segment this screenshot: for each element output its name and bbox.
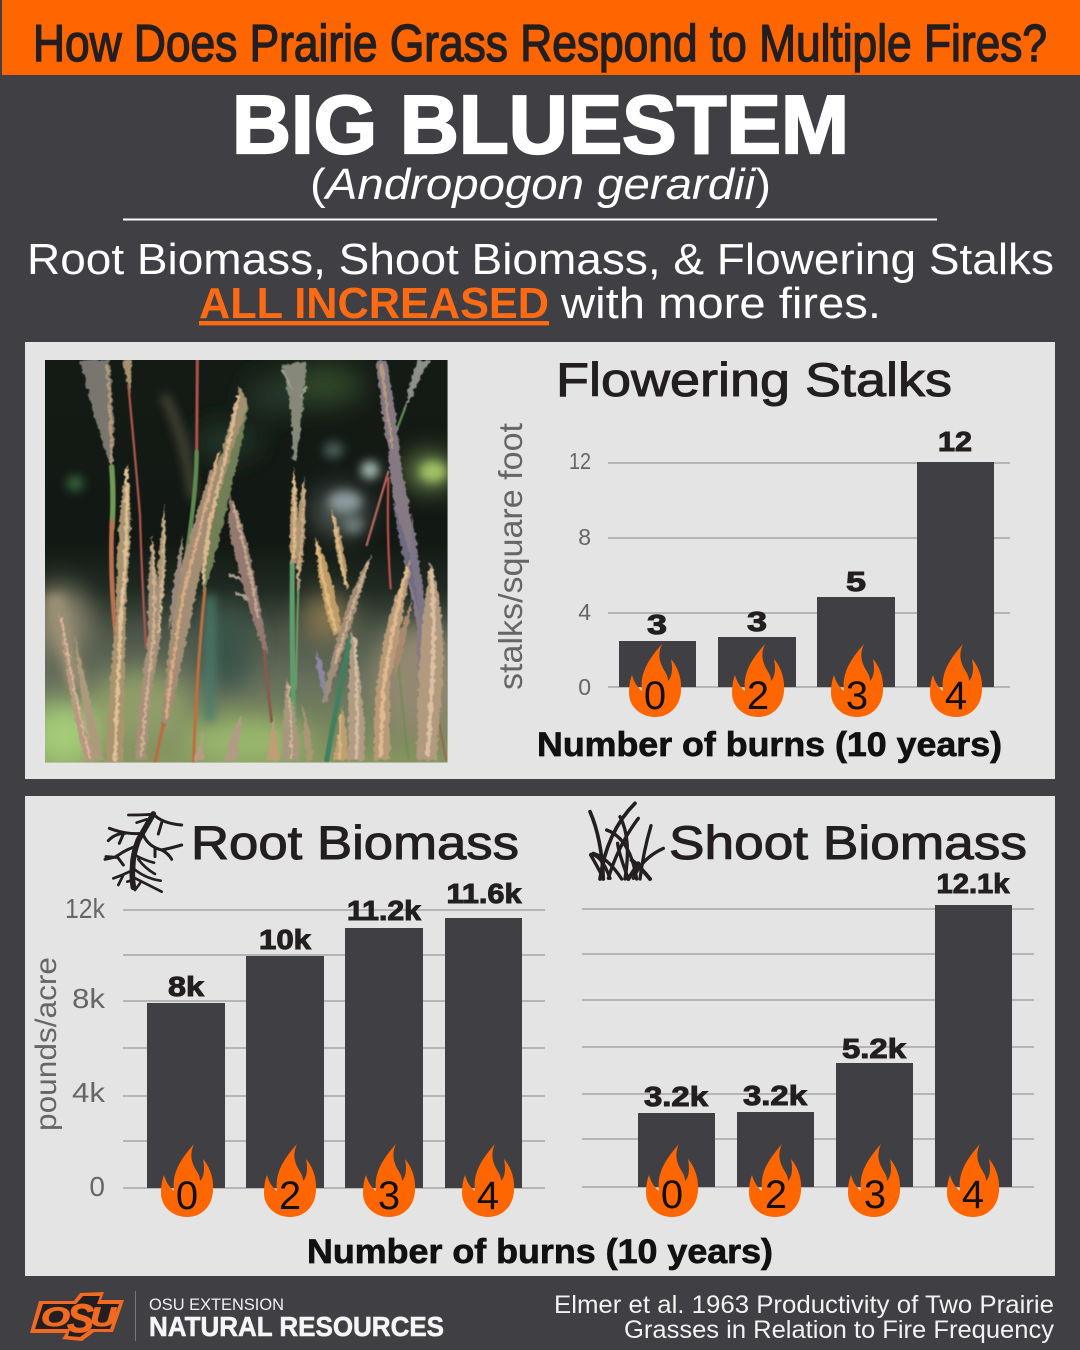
y axis label: pounds per acre: pounds/acre: [30, 957, 63, 1131]
logo: OSU: [30, 1292, 124, 1341]
bar chart: root biomass: 3: [378, 1174, 400, 1218]
heading: root biomass: Root Biomass: [191, 816, 519, 869]
panel: root and shoot biomass: [25, 796, 1055, 1276]
x axis label: number of burns: Number of burns (10 years): [307, 1233, 773, 1271]
bar chart: root biomass: 8k: [168, 971, 204, 1002]
bar chart: flowering stalks: 3: [647, 609, 667, 640]
bar chart: shoot biomass: 0: [661, 1173, 683, 1217]
heading: species name: BIG BLUESTEM: [232, 78, 849, 171]
bar chart: root biomass: 4k: [72, 1077, 106, 1108]
grain highlights: [62, 365, 433, 760]
footer: OSU Extension Natural Resources: NATURAL RESOURCES: [149, 1311, 444, 1342]
x axis label: number of burns: Number of burns (10 years): [537, 726, 1002, 764]
bar chart: shoot biomass: 12.1k: [936, 868, 1010, 899]
bar chart: flowering stalks: 3: [846, 674, 868, 718]
bar chart: root biomass: 10k: [259, 924, 311, 955]
stems: [111, 360, 446, 762]
y axis label: stalks per square foot: stalks/square foot: [492, 423, 529, 690]
icon: grass shoots: [590, 803, 663, 879]
bar chart: flowering stalks: [569, 426, 1010, 718]
bar chart: root biomass: 2: [279, 1174, 301, 1218]
bar chart: flowering stalks: 3: [747, 606, 767, 637]
bar chart: flowering stalks: 2: [747, 674, 769, 718]
heading: flowering stalks: Flowering Stalks: [556, 353, 952, 406]
logo: OSU: O: [41, 1302, 70, 1332]
bar chart: root biomass: 11.6k: [446, 878, 522, 909]
bar chart: root biomass: 8k: [72, 983, 106, 1014]
heading: shoot biomass: Shoot Biomass: [669, 816, 1027, 869]
bar chart: root biomass: 4: [477, 1174, 499, 1218]
bar chart: flowering stalks: 12: [938, 426, 972, 457]
source citation: Grasses in Relation to Fire Frequency: [624, 1316, 1055, 1344]
bar chart: root biomass: 0: [89, 1171, 105, 1202]
bar chart: root biomass: 11.2k: [347, 895, 421, 926]
summary text: ALL INCREASED: [199, 279, 549, 328]
bar chart: shoot biomass: 4: [962, 1173, 984, 1217]
summary text: Root Biomass, Shoot Biomass, & Flowering Stalks: [27, 235, 1054, 284]
bar chart: shoot biomass: 3.2k: [743, 1080, 807, 1111]
subheading: scientific name: (Andropogon gerardii ): [310, 160, 771, 209]
bar chart: flowering stalks: 0: [578, 674, 591, 700]
bar chart: flowering stalks: 4: [578, 599, 591, 625]
bar chart: shoot biomass: [582, 868, 1034, 1217]
source citation: Elmer et al. 1963 Productivity of Two Prairie: [554, 1291, 1054, 1319]
source citation: [554, 1291, 1055, 1344]
bar chart: root biomass: 0: [176, 1174, 198, 1218]
summary text: [27, 235, 1054, 328]
panel: photo and flowering stalks: [25, 342, 1055, 779]
bar chart: flowering stalks: 5: [846, 566, 866, 597]
bar chart: flowering stalks: 4: [945, 674, 967, 718]
footer: OSU Extension Natural Resources: [149, 1295, 444, 1342]
bar chart: shoot biomass: 2: [765, 1173, 787, 1217]
bar chart: shoot biomass: 3: [864, 1173, 886, 1217]
bar chart: shoot biomass: 5.2k: [842, 1033, 906, 1064]
logo: OSU: U: [90, 1302, 118, 1332]
photo: big bluestem grass: [27, 360, 460, 768]
bar chart: flowering stalks: 0: [644, 674, 666, 718]
logo: OSU: S: [67, 1297, 94, 1341]
footer: OSU Extension Natural Resources: OSU EXTENSION: [149, 1295, 284, 1314]
icon: roots: [105, 814, 182, 892]
bar chart: shoot biomass: 3.2k: [644, 1081, 708, 1112]
seed heads: [58, 360, 443, 762]
summary text: with more fires.: [560, 279, 881, 328]
bar chart: root biomass: [65, 878, 545, 1218]
bar chart: root biomass: 12k: [65, 893, 106, 924]
bar chart: flowering stalks: 8: [578, 524, 591, 550]
bar chart: flowering stalks: 12: [569, 448, 591, 474]
